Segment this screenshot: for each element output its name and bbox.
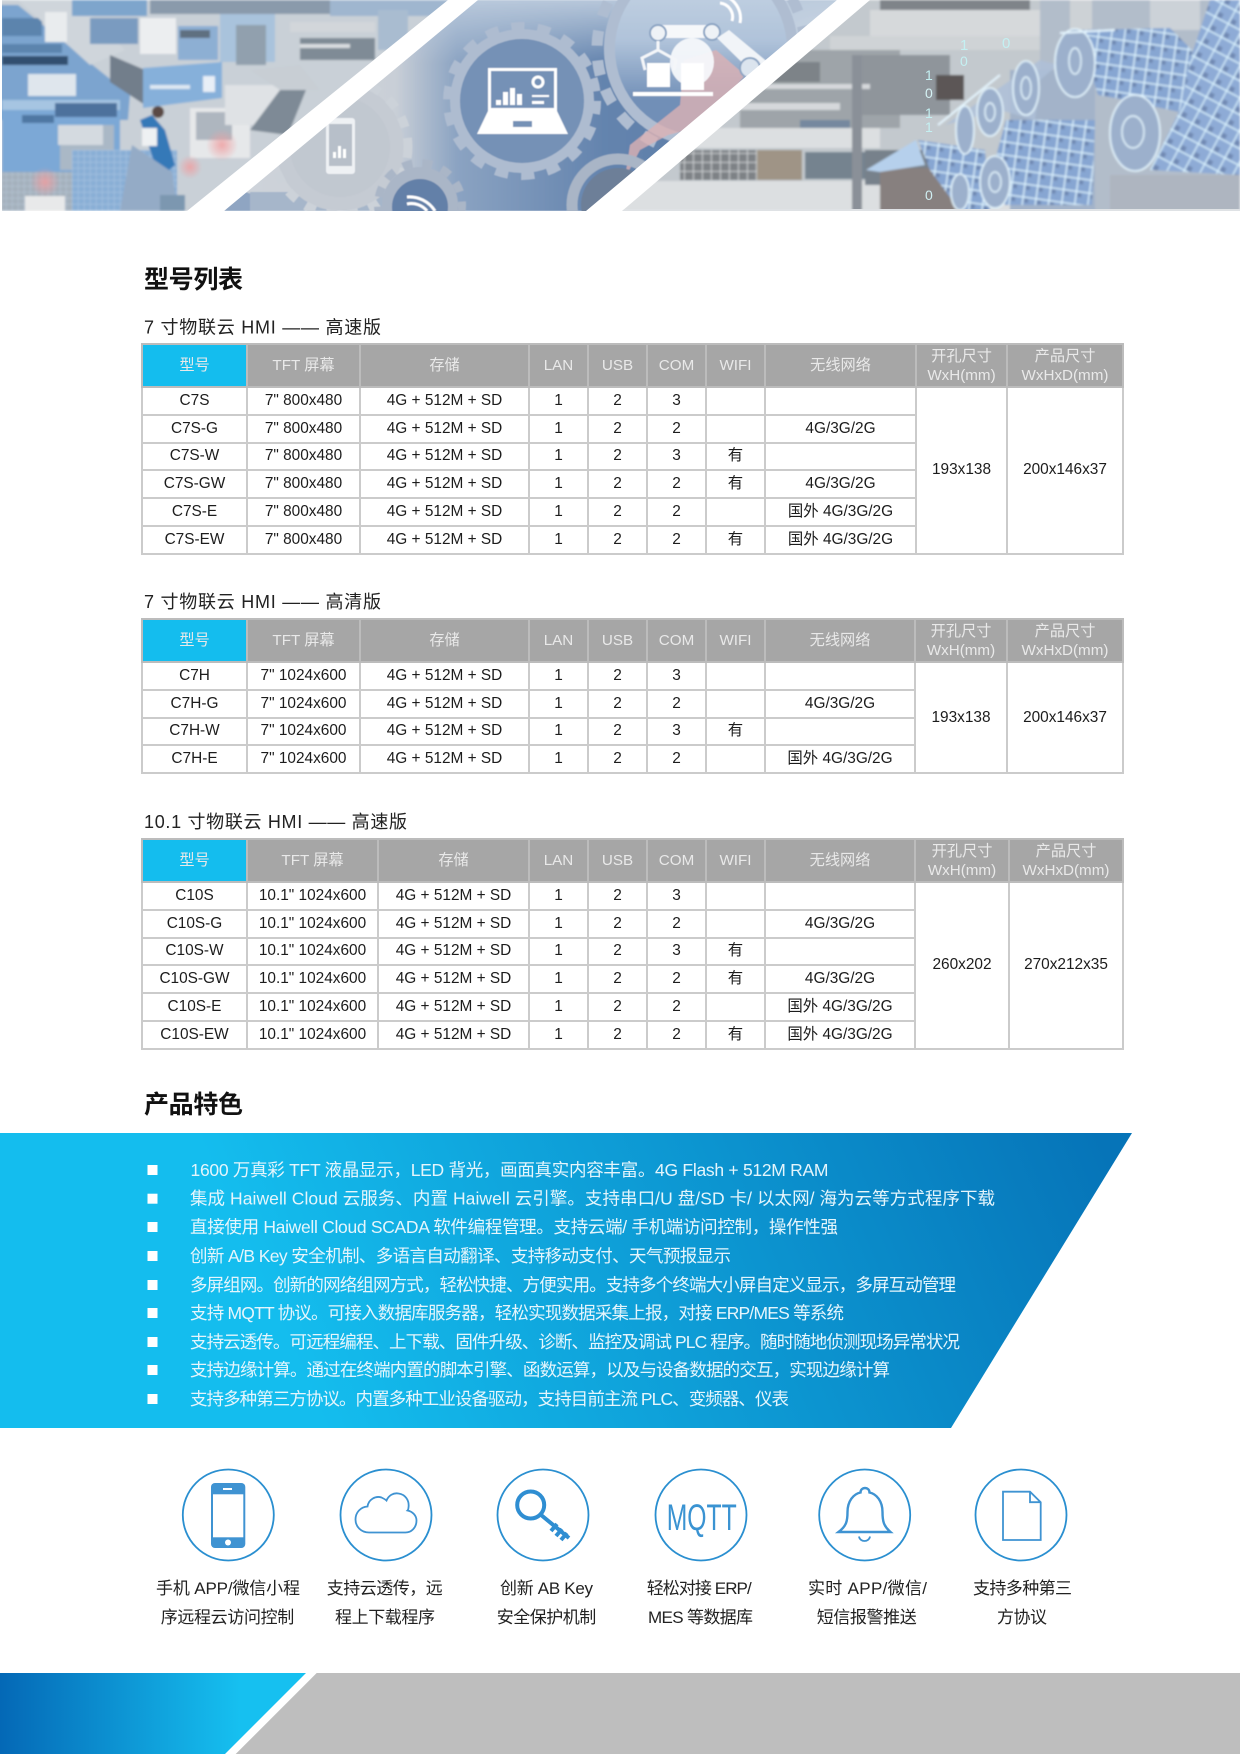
table: 7 inch high speed models: 200x146x37 xyxy=(1023,461,1107,478)
table: 7 inch high speed models: 2 xyxy=(672,531,681,548)
table: 10.1 inch high speed models: WxH(mm) xyxy=(928,862,996,878)
table: 7 inch high definition models: 7" 1024x600 xyxy=(261,667,346,684)
table: 7 inch high definition models: 型号 xyxy=(179,632,210,649)
caption xyxy=(327,1579,443,1627)
table: 7 inch high definition models: 产品尺寸 xyxy=(1035,622,1095,640)
feature: MQTT xyxy=(647,1470,753,1627)
table: 10.1 inch high speed models: 1 xyxy=(554,998,563,1015)
feature: cloud passthrough xyxy=(327,1470,443,1627)
binary digits: 0 xyxy=(960,53,968,69)
binary digits: 0 xyxy=(925,85,933,101)
footer: blue wedge xyxy=(0,1673,306,1754)
caption xyxy=(973,1579,1072,1627)
table: 7 inch high definition models: 3 xyxy=(672,667,681,684)
table: 7 inch high definition models: WIFI xyxy=(719,632,752,649)
table: 7 inch high definition models: 193x138 xyxy=(931,709,991,726)
footer: gray wedge xyxy=(236,1673,1240,1754)
table: 7 inch high speed models: 有 xyxy=(728,531,743,548)
table: 7 inch high speed models: 1 xyxy=(554,392,563,409)
feature: alarm push xyxy=(808,1470,927,1627)
table: 7 inch high speed models: C7S-E xyxy=(172,503,217,520)
table: 7 inch high speed models: C7S-W xyxy=(170,447,219,464)
table: 7 inch high speed models: 7" 800x480 xyxy=(265,392,342,409)
table: 10.1 inch high speed models: TFT 屏幕 xyxy=(281,852,344,869)
table: 10.1 inch high speed models: 10.1" 1024x600 xyxy=(259,1026,366,1043)
table: 7 inch high speed models: 有 xyxy=(728,475,743,492)
table: 7 inch high speed models: 2 xyxy=(672,475,681,492)
table: 7 inch high definition models: 有 xyxy=(728,722,743,739)
table: 10.1 inch high speed models: 10.1" 1024x600 xyxy=(259,887,366,904)
table: 10.1 inch high speed models: 开孔尺寸 xyxy=(932,842,992,860)
icon: phone xyxy=(326,118,355,174)
table: 10.1 inch high speed models: USB xyxy=(602,852,633,869)
table: 10.1 inch high speed models: 国外 4G/3G/2G xyxy=(787,998,893,1015)
table: 7 inch high definition models: 1 xyxy=(554,750,563,767)
table: 10.1 inch high speed models: C10S-E xyxy=(168,998,221,1015)
table: 10.1 inch high speed models: 1 xyxy=(554,1026,563,1043)
table: 7 inch high definition models: 无线网络 xyxy=(810,632,870,649)
table: 7 inch high speed models: 4G + 512M + SD xyxy=(387,420,502,437)
icon: cloud xyxy=(340,1470,432,1560)
table: 7 inch high definition models: 国外 4G/3G/2G xyxy=(787,750,893,767)
banner photo: gears with laptop, phone and robot arm xyxy=(224,0,837,211)
table: 10.1 inch high speed models: 1 xyxy=(554,887,563,904)
roller belts xyxy=(866,0,1240,211)
table: 7 inch high speed models: 2 xyxy=(672,503,681,520)
table: 7 inch high speed models: 1 xyxy=(554,420,563,437)
table: 7 inch high definition models: 2 xyxy=(613,750,622,767)
table: 10.1 inch high speed models: 2 xyxy=(613,970,622,987)
subheading: 10.1 inch high speed: 10.1 寸物联云 HMI —— 高速版 xyxy=(144,812,407,832)
table: 7 inch high speed models: 193x138 xyxy=(932,461,991,478)
gear: robot xyxy=(597,0,805,153)
table: 7 inch high speed models: 1 xyxy=(554,475,563,492)
table: 7 inch high speed models: 7" 800x480 xyxy=(265,420,342,437)
table: 7 inch high definition models: 存储 xyxy=(429,632,460,649)
table: 7 inch high speed models: WxHxD(mm) xyxy=(1022,366,1108,384)
table: 10.1 inch high speed models: 4G/3G/2G xyxy=(805,970,875,987)
banner photo: factory floor xyxy=(0,0,460,211)
table: 10.1 inch high speed models: 4G/3G/2G xyxy=(805,915,875,932)
feature: third-party protocols xyxy=(973,1470,1072,1627)
table: 7 inch high speed models: 2 xyxy=(672,420,681,437)
table: 10.1 inch high speed models: 3 xyxy=(672,942,681,959)
table: 7 inch high speed models: WxH(mm) xyxy=(927,366,996,384)
table: 7 inch high speed models: 4G/3G/2G xyxy=(805,420,876,437)
table: 7 inch high definition models: 2 xyxy=(672,695,681,712)
table: 7 inch high definition models: 1 xyxy=(554,722,563,739)
heading: product features: 产品特色 xyxy=(144,1091,243,1119)
table: 7 inch high speed models: C7S-EW xyxy=(165,531,224,548)
table: 10.1 inch high speed models: 2 xyxy=(672,970,681,987)
feature: AB key xyxy=(497,1470,596,1627)
table: 7 inch high speed models: USB xyxy=(602,357,633,374)
binary digits: 1 xyxy=(925,119,933,135)
table: 7 inch high speed models: 国外 4G/3G/2G xyxy=(788,531,893,548)
table: 10.1 inch high speed models: COM xyxy=(659,852,694,869)
table: 7 inch high speed models: 7" 800x480 xyxy=(265,531,342,548)
table: 10.1 inch high speed models: 1 xyxy=(554,915,563,932)
feature: phone app xyxy=(156,1470,300,1627)
table: 7 inch high speed models: 1 xyxy=(554,447,563,464)
table: 10.1 inch high speed models: WxHxD(mm) xyxy=(1023,862,1109,878)
subheading: 7 inch high speed: 7 寸物联云 HMI —— 高速版 xyxy=(144,318,381,338)
table: 10.1 inch high speed models: WIFI xyxy=(719,852,752,869)
rollers xyxy=(951,29,1160,210)
table: 7 inch high definition models: 4G/3G/2G xyxy=(805,695,875,712)
table: 10.1 inch high speed models: C10S xyxy=(175,887,214,904)
caption: 支持多种第三 xyxy=(973,1579,1072,1598)
table: 10.1 inch high speed models: 型号 xyxy=(179,852,210,869)
table: 10.1 inch high speed models: 10.1" 1024x600 xyxy=(259,998,366,1015)
table: 7 inch high speed models xyxy=(141,343,1124,555)
table: 7 inch high speed models: 7" 800x480 xyxy=(265,447,342,464)
table: 10.1 inch high speed models: 2 xyxy=(672,915,681,932)
caption: 支持云透传，远 xyxy=(327,1579,443,1598)
table: 10.1 inch high speed models: LAN xyxy=(544,852,573,869)
panel: feature band xyxy=(0,1133,1132,1428)
caption xyxy=(156,1579,300,1627)
table: 7 inch high speed models: 2 xyxy=(613,503,622,520)
table: 10.1 inch high speed models: 10.1" 1024x600 xyxy=(259,970,366,987)
table: 7 inch high definition models: 7" 1024x600 xyxy=(261,722,346,739)
table: 7 inch high definition models: LAN xyxy=(544,632,573,649)
binary digits: 1 xyxy=(925,67,933,83)
caption: 手机 APP/微信小程 xyxy=(156,1579,300,1598)
table: 10.1 inch high speed models: 4G + 512M + SD xyxy=(396,1026,511,1043)
table: 7 inch high speed models: 产品尺寸 xyxy=(1035,348,1095,364)
table: 7 inch high definition models: 开孔尺寸 xyxy=(931,622,991,640)
feature list text: 多屏组网。创新的网络组网方式，轻松快捷、方便实用。支持多个终端大小屏自定义显示，多屏互动管理 xyxy=(190,1275,956,1295)
robot highlight glow xyxy=(625,38,745,178)
table: 7 inch high speed models: 4G + 512M + SD xyxy=(387,392,502,409)
table: 7 inch high speed models: 型号 xyxy=(179,357,210,374)
icon: bell xyxy=(819,1470,910,1560)
table: 7 inch high speed models: 4G + 512M + SD xyxy=(387,531,502,548)
table: 10.1 inch high speed models: 产品尺寸 xyxy=(1036,842,1096,860)
table: 7 inch high definition models: 2 xyxy=(613,722,622,739)
caption: 创新 AB Key xyxy=(500,1579,594,1598)
table: 7 inch high speed models: 3 xyxy=(672,392,681,409)
caption: 安全保护机制 xyxy=(497,1608,596,1627)
binary digits: 1 xyxy=(925,105,933,121)
binary digits: 0 xyxy=(925,187,933,203)
table: 10.1 inch high speed models: 有 xyxy=(728,970,743,987)
table: 10.1 inch high speed models: 270x212x35 xyxy=(1024,956,1108,973)
table: 7 inch high definition models: C7H xyxy=(179,667,210,684)
caption xyxy=(808,1579,927,1627)
caption: 实时 APP/微信/ xyxy=(808,1579,927,1598)
icon: MQTT xyxy=(656,1470,746,1560)
table: 7 inch high definition models: WxH(mm) xyxy=(927,642,995,658)
table: 7 inch high speed models: 4G/3G/2G xyxy=(805,475,876,492)
table: 7 inch high definition models: 4G + 512M + SD xyxy=(387,695,502,712)
table: 7 inch high speed models: 存储 xyxy=(429,357,460,374)
feature list text: 支持云透传。可远程编程、上下载、固件升级、诊断、监控及调试 PLC 程序。随时随地侦测现场异常状况 xyxy=(190,1332,960,1352)
feature list text: 支持多种第三方协议。内置多种工业设备驱动，支持目前主流 PLC、变频器、仪表 xyxy=(190,1389,789,1409)
table: 7 inch high definition models: 7" 1024x600 xyxy=(261,695,346,712)
table: 7 inch high speed models: 1 xyxy=(554,503,563,520)
table: 7 inch high definition models: 2 xyxy=(613,695,622,712)
table: 10.1 inch high speed models: C10S-G xyxy=(167,915,222,932)
table: 7 inch high definition models: 4G + 512M + SD xyxy=(387,667,502,684)
table: 7 inch high speed models: 国外 4G/3G/2G xyxy=(788,503,893,520)
table: 7 inch high definition models: COM xyxy=(659,632,694,649)
table: 7 inch high speed models: 2 xyxy=(613,475,622,492)
table: 7 inch high speed models: LAN xyxy=(544,357,573,374)
table: 10.1 inch high speed models: 国外 4G/3G/2G xyxy=(787,1026,893,1043)
caption xyxy=(497,1579,596,1627)
table: 7 inch high speed models: 3 xyxy=(672,447,681,464)
table: 10.1 inch high speed models: 有 xyxy=(728,1026,743,1043)
table: 7 inch high speed models: C7S xyxy=(180,392,209,409)
binary digits: 1 xyxy=(960,37,968,54)
table: 7 inch high definition models: 1 xyxy=(554,667,563,684)
gear: laptop xyxy=(448,27,596,175)
caption: MES 等数据库 xyxy=(648,1608,753,1627)
table: 10.1 inch high speed models: 4G + 512M + SD xyxy=(396,970,511,987)
table: 10.1 inch high speed models xyxy=(141,838,1124,1050)
table: 7 inch high speed models: C7S-G xyxy=(171,420,218,437)
feature list text: 支持 MQTT 协议。可接入数据库服务器，轻松实现数据采集上报，对接 ERP/MES 等系统 xyxy=(190,1303,844,1323)
feature list text: 直接使用 Haiwell Cloud SCADA 软件编程管理。支持云端/ 手机端访问控制，操作性强 xyxy=(190,1217,838,1237)
table: 7 inch high speed models: 4G + 512M + SD xyxy=(387,447,502,464)
table: 10.1 inch high speed models: 260x202 xyxy=(932,956,992,973)
table: 10.1 inch high speed models: C10S-GW xyxy=(159,970,230,987)
caption: 轻松对接 ERP/ xyxy=(647,1579,752,1598)
table: 7 inch high speed models: 2 xyxy=(613,420,622,437)
table: 10.1 inch high speed models: C10S-W xyxy=(165,942,224,959)
table: 10.1 inch high speed models: 2 xyxy=(672,998,681,1015)
table: 10.1 inch high speed models: 1 xyxy=(554,970,563,987)
table: 7 inch high definition models: 200x146x37 xyxy=(1023,709,1107,726)
icon: file xyxy=(976,1470,1066,1560)
table: 10.1 inch high speed models: 4G + 512M + SD xyxy=(396,942,511,959)
feature list text xyxy=(190,1160,995,1409)
table: 7 inch high speed models: 2 xyxy=(613,392,622,409)
gear: bottom xyxy=(566,153,646,211)
table: 7 inch high speed models: WIFI xyxy=(719,357,752,374)
table: 7 inch high speed models: 有 xyxy=(728,447,743,464)
gear: phone xyxy=(285,101,412,211)
gear: wifi xyxy=(374,160,466,211)
feature list text: 集成 Haiwell Cloud 云服务、内置 Haiwell 云引擎。支持串口/U 盘/SD 卡/ 以太网/ 海为云等方式程序下载 xyxy=(190,1188,995,1208)
table: 7 inch high speed models: 2 xyxy=(613,531,622,548)
icon: robot arm xyxy=(633,0,770,96)
banner photo: industrial rollers with data overlay xyxy=(622,0,1240,211)
table: 7 inch high speed models: 4G + 512M + SD xyxy=(387,475,502,492)
table: 10.1 inch high speed models: 10.1" 1024x600 xyxy=(259,942,366,959)
table: 10.1 inch high speed models: 3 xyxy=(672,887,681,904)
table: 7 inch high definition models: 1 xyxy=(554,695,563,712)
icon: laptop xyxy=(477,68,568,134)
table: 10.1 inch high speed models: 1 xyxy=(554,942,563,959)
table: 7 inch high definition models: USB xyxy=(602,632,633,649)
table: 7 inch high definition models xyxy=(141,618,1124,774)
caption xyxy=(647,1579,753,1627)
table: 7 inch high speed models: 2 xyxy=(613,447,622,464)
caption: 短信报警推送 xyxy=(817,1608,917,1627)
table: 7 inch high speed models: 1 xyxy=(554,531,563,548)
table: 7 inch high definition models: 4G + 512M + SD xyxy=(387,722,502,739)
table: 10.1 inch high speed models: 2 xyxy=(613,1026,622,1043)
table: 10.1 inch high speed models: 2 xyxy=(613,998,622,1015)
feature list text: 支持边缘计算。通过在终端内置的脚本引擎、函数运算，以及与设备数据的交互，实现边缘计算 xyxy=(190,1360,890,1380)
table: 7 inch high definition models: C7H-W xyxy=(169,722,220,739)
table: 7 inch high speed models: COM xyxy=(659,357,694,374)
table: 10.1 inch high speed models: 有 xyxy=(728,942,743,959)
caption: 程上下载程序 xyxy=(335,1608,435,1627)
table: 7 inch high definition models: WxHxD(mm) xyxy=(1022,642,1108,658)
table: 10.1 inch high speed models: C10S-EW xyxy=(160,1026,229,1043)
table: 10.1 inch high speed models: 无线网络 xyxy=(810,852,870,869)
table: 7 inch high definition models: TFT 屏幕 xyxy=(272,632,335,649)
table: 7 inch high definition models: 2 xyxy=(672,750,681,767)
icon: MQTT: MQTT xyxy=(667,1497,737,1538)
caption: 方协议 xyxy=(997,1608,1047,1627)
table: 7 inch high speed models: C7S-GW xyxy=(164,475,225,492)
table: 10.1 inch high speed models: 4G + 512M + SD xyxy=(396,915,511,932)
table: 10.1 inch high speed models: 2 xyxy=(613,942,622,959)
table: 10.1 inch high speed models: 10.1" 1024x600 xyxy=(259,915,366,932)
table: 10.1 inch high speed models: 存储 xyxy=(438,852,469,869)
table: 7 inch high definition models: C7H-G xyxy=(171,695,218,712)
table: 10.1 inch high speed models: 2 xyxy=(613,915,622,932)
table: 7 inch high speed models: TFT 屏幕 xyxy=(272,357,335,374)
heading: model list: 型号列表 xyxy=(144,266,243,294)
caption: 序远程云访问控制 xyxy=(161,1608,294,1627)
feature list bullets xyxy=(148,1165,158,1404)
table: 10.1 inch high speed models: 4G + 512M + SD xyxy=(396,887,511,904)
binary digits: 0 xyxy=(1002,35,1010,52)
feature list text: 创新 A/B Key 安全机制、多语言自动翻译、支持移动支付、天气预报显示 xyxy=(190,1246,731,1266)
table: 7 inch high definition models: 7" 1024x600 xyxy=(261,750,346,767)
table: 7 inch high definition models: C7H-E xyxy=(171,750,218,767)
icon: phone xyxy=(183,1470,274,1560)
table: 10.1 inch high speed models: 2 xyxy=(672,1026,681,1043)
table: 10.1 inch high speed models: 2 xyxy=(613,887,622,904)
table: 7 inch high speed models: 开孔尺寸 xyxy=(931,348,992,364)
feature list text: 1600 万真彩 TFT 液晶显示，LED 背光，画面真实内容丰富。4G Flash + 512M RAM xyxy=(190,1160,828,1180)
icon: key xyxy=(498,1470,588,1560)
table: 7 inch high speed models: 4G + 512M + SD xyxy=(387,503,502,520)
binary digits xyxy=(925,35,1010,203)
table: 7 inch high speed models: 无线网络 xyxy=(810,357,871,374)
subheading: 7 inch high definition: 7 寸物联云 HMI —— 高清版 xyxy=(144,592,381,612)
table: 7 inch high speed models: 7" 800x480 xyxy=(265,475,342,492)
table: 7 inch high definition models: 2 xyxy=(613,667,622,684)
table: 7 inch high definition models: 3 xyxy=(672,722,681,739)
table: 7 inch high speed models: 7" 800x480 xyxy=(265,503,342,520)
table: 10.1 inch high speed models: 4G + 512M + SD xyxy=(396,998,511,1015)
table: 7 inch high definition models: 4G + 512M + SD xyxy=(387,750,502,767)
